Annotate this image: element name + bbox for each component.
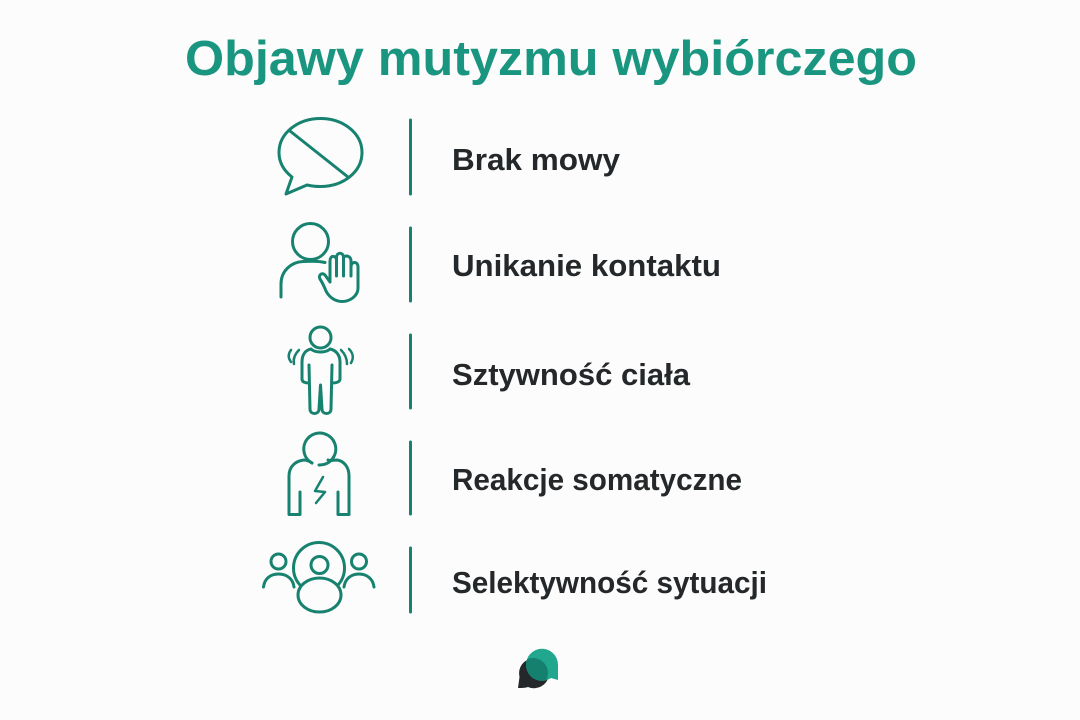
label: Unikanie kontaktu xyxy=(452,248,721,283)
divider xyxy=(409,120,412,194)
divider xyxy=(409,442,412,514)
row: Sztywność ciała xyxy=(289,327,691,414)
label: Brak mowy xyxy=(452,142,621,177)
row: Selektywność sytuacji xyxy=(264,542,767,612)
icon: torso with lightning bolt xyxy=(289,433,349,514)
icon: logo speech bubbles xyxy=(518,649,558,688)
row: Brak mowy xyxy=(279,118,621,194)
row: Unikanie kontaktu xyxy=(281,224,721,302)
icon: crossed-out speech bubble xyxy=(279,118,362,194)
divider xyxy=(409,335,412,408)
title: Objawy mutyzmu wybiórczego xyxy=(185,32,917,86)
label: Selektywność sytuacji xyxy=(452,565,767,600)
icon: group of people xyxy=(264,542,374,612)
divider xyxy=(409,228,412,301)
row: Reakcje somatyczne xyxy=(289,433,742,514)
divider xyxy=(409,548,412,612)
icon: person with raised hand xyxy=(281,224,358,302)
icon: stiff body with tremor marks xyxy=(289,327,353,414)
label: Sztywność ciała xyxy=(452,357,691,392)
label: Reakcje somatyczne xyxy=(452,462,742,497)
